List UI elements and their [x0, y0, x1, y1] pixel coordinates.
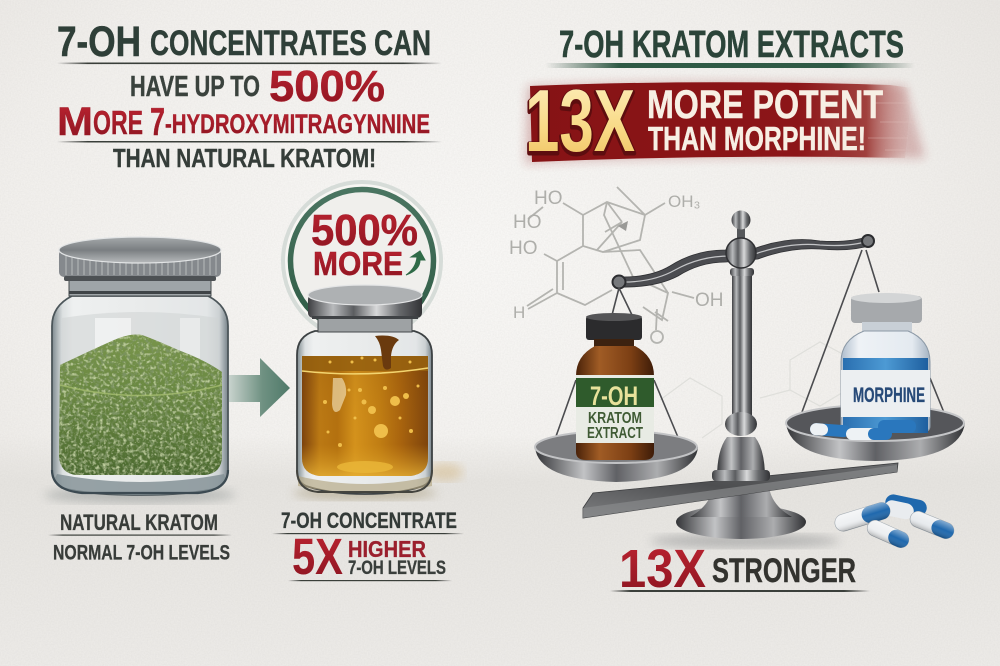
molecule atom labels: HO: [513, 212, 542, 233]
caption: 13X stronger: [610, 539, 870, 599]
title: 7-OH concentrates can: 7-OH: [57, 18, 141, 66]
title: 7-OH concentrates can: [57, 18, 431, 66]
banner brush stroke: [525, 82, 925, 164]
label: 5X higher levels: 5X: [292, 528, 343, 585]
label: natural kratom: NATURAL KRATOM: [60, 510, 218, 535]
bottle: morphine: [810, 293, 930, 440]
bottle label: KRATOM: [588, 410, 642, 427]
bottle label: [576, 375, 654, 443]
heading line: more 7-hydroxymitragynnine: M: [57, 100, 93, 144]
pills in pan: [810, 420, 916, 440]
13X gold numeral: 13X: [525, 71, 635, 170]
heading line: more 7-hydroxymitragynnine: ORE: [93, 104, 143, 141]
bottle cap: [586, 313, 642, 347]
molecule atom labels: HO: [534, 188, 562, 209]
label: normal levels: NORMAL 7-OH LEVELS: [53, 542, 230, 564]
green powder: [59, 335, 222, 475]
molecule atom labels: [509, 188, 724, 322]
jar: 7-OH concentrate oil: [293, 285, 463, 500]
bubbles: [323, 356, 420, 447]
heading line: have up to 500%: [130, 62, 385, 111]
right jar labels: [272, 508, 464, 585]
post: [712, 210, 770, 481]
label: 5X higher levels: 7-OH LEVELS: [348, 558, 446, 579]
heading line: have up to 500%: 500%: [269, 62, 385, 111]
13X gold numeral: [525, 71, 635, 172]
badge text: 500%: [311, 206, 418, 255]
heading line: more 7-hydroxymitragynnine: -HYDROXYMITRAGYNNINE: [165, 109, 430, 139]
bottle cap: [851, 293, 922, 332]
banner text: [647, 83, 883, 157]
right pan: [786, 405, 965, 461]
capsule: front: [865, 518, 911, 550]
floor shadow: [650, 534, 840, 548]
icon: up arrow: [406, 251, 425, 275]
chains: [554, 250, 945, 442]
left pan: [535, 431, 698, 482]
curved beam: [617, 236, 872, 287]
loose capsules: [833, 493, 956, 550]
badge text: MORE: [313, 245, 403, 282]
arrow: natural to concentrate: [229, 358, 290, 417]
label: 5X higher levels: HIGHER: [348, 536, 426, 562]
jar: natural kratom powder: [44, 237, 236, 503]
heading line: have up to 500%: HAVE UP TO: [130, 71, 260, 103]
banner text: THAN MORPHINE!: [648, 120, 866, 157]
badge text: [311, 206, 418, 282]
molecule diagram: [509, 187, 875, 438]
jar lid: [59, 237, 221, 281]
left jar labels: [48, 510, 232, 564]
caption: 13X stronger: 13X: [619, 539, 706, 599]
bottle label: 7-OH: [590, 381, 638, 411]
jar lid: [308, 285, 422, 319]
tilted plank: [583, 463, 898, 518]
label: 5X higher levels: [292, 528, 446, 585]
left heading block: [57, 18, 442, 173]
beam hub: [726, 238, 756, 268]
bottle label: MORPHINE: [853, 384, 925, 407]
balance scale: [554, 210, 945, 548]
jar body: [52, 296, 228, 495]
heading line: more 7-hydroxymitragynnine: 7: [150, 101, 165, 144]
scale foot: [676, 486, 806, 539]
capsule: rear blue and white: [883, 493, 928, 523]
heading line: than natural kratom: THAN NATURAL KRATOM!: [113, 143, 376, 173]
13X gold numeral: 13X: [525, 73, 635, 172]
capsule: left: [833, 500, 892, 533]
caption: 13X stronger: STRONGER: [712, 552, 856, 590]
label: 7-OH concentrate: 7-OH CONCENTRATE: [281, 508, 457, 533]
banner text: MORE POTENT: [647, 83, 883, 127]
red banner: 13X more potent than morphine: [525, 71, 925, 172]
title: 7-OH concentrates can: CONCENTRATES CAN: [150, 24, 431, 63]
capsule: right: [908, 509, 956, 541]
bottle label: EXTRACT: [587, 425, 643, 442]
bottle: 7-OH kratom extract: [576, 313, 654, 460]
molecule atom labels: OH: [695, 290, 724, 311]
amber liquid: [302, 356, 428, 476]
jar body: [297, 331, 432, 494]
bottle label: [841, 370, 930, 417]
badge: 500% more: [281, 180, 443, 342]
molecule atom labels: OH₃: [668, 192, 700, 211]
molecule atom labels: HO: [509, 238, 538, 259]
heading line: more 7-hydroxymitragynnine: [57, 100, 430, 144]
molecule atom labels: H: [513, 303, 525, 322]
